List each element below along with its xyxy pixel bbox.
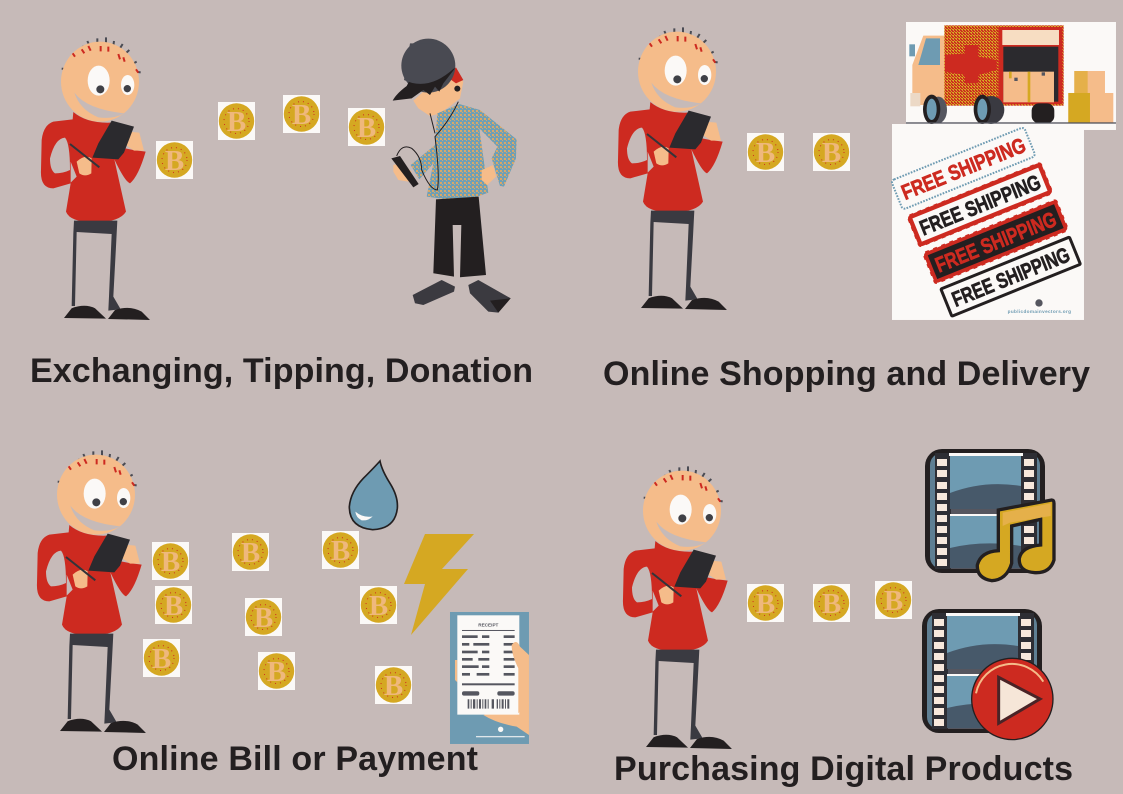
coin 1: B bbox=[165, 145, 184, 177]
coin 4 bbox=[232, 533, 269, 571]
coin 4: B bbox=[357, 112, 376, 144]
figure: man with tablet bbox=[623, 466, 732, 749]
coin 1: B bbox=[756, 588, 775, 620]
coin 9 bbox=[375, 666, 412, 704]
coin 2: B bbox=[227, 106, 246, 138]
heading: Online Bill or Payment bbox=[112, 740, 478, 778]
coin 4 bbox=[348, 108, 385, 146]
coin 3 bbox=[875, 581, 912, 619]
stamp: black border: FREE SHIPPING bbox=[948, 243, 1073, 312]
coin 2 bbox=[813, 584, 850, 622]
coin 1: B bbox=[756, 137, 775, 169]
coin 3 bbox=[143, 639, 180, 677]
panel: exchanging, tipping, donation bbox=[30, 37, 533, 390]
coin 5 bbox=[245, 598, 282, 636]
coin 9: B bbox=[384, 670, 403, 702]
figure: man with tablet bbox=[37, 450, 146, 733]
coin 7: B bbox=[331, 535, 350, 567]
coin 6: B bbox=[267, 656, 286, 688]
stamp: red border: FREE SHIPPING bbox=[916, 170, 1044, 240]
coin 2 bbox=[813, 133, 850, 171]
coin 3 bbox=[283, 95, 320, 133]
image: receipt in hand: RECEIPT bbox=[478, 623, 499, 628]
stamp: black filled: FREE SHIPPING bbox=[932, 207, 1060, 277]
coin 1 bbox=[152, 542, 189, 580]
coin 6 bbox=[258, 652, 295, 690]
coin 3: B bbox=[884, 585, 903, 617]
figure: man with tablet bbox=[618, 27, 727, 310]
coin 2: B bbox=[822, 137, 841, 169]
icon: film with play button bbox=[922, 609, 1053, 740]
icon: lightning bolt bbox=[404, 534, 474, 635]
heading: Online Shopping and Delivery bbox=[603, 355, 1090, 393]
coin 2: B bbox=[822, 588, 841, 620]
coin 2 bbox=[218, 102, 255, 140]
panel: online shopping and delivery bbox=[603, 22, 1116, 393]
image: receipt in hand bbox=[450, 612, 529, 744]
coin 2: B bbox=[164, 590, 183, 622]
image: delivery truck bbox=[906, 22, 1116, 130]
heading: Purchasing Digital Products bbox=[614, 750, 1073, 788]
coin 2 bbox=[155, 586, 192, 624]
icon: water drop bbox=[349, 461, 397, 530]
coin 3: B bbox=[152, 643, 171, 675]
coin 3: B bbox=[292, 99, 311, 131]
figure: boy with cap and phone bbox=[391, 39, 517, 313]
coin 1 bbox=[747, 584, 784, 622]
stamp: red border bbox=[908, 163, 1052, 246]
coin 8 bbox=[360, 586, 397, 624]
coin 4: B bbox=[241, 537, 260, 569]
coin 8: B bbox=[369, 590, 388, 622]
coin 1 bbox=[156, 141, 193, 179]
stamp: dotted outline: FREE SHIPPING bbox=[898, 133, 1029, 205]
panel: purchasing digital products bbox=[614, 449, 1073, 788]
coin 7 bbox=[322, 531, 359, 569]
stamp: black filled bbox=[924, 200, 1068, 283]
stamp: black border bbox=[941, 237, 1080, 316]
coin 1: B bbox=[161, 546, 180, 578]
coin 1 bbox=[747, 133, 784, 171]
icon: film with music note bbox=[925, 449, 1054, 581]
heading: Exchanging, Tipping, Donation bbox=[30, 352, 533, 390]
coin 5: B bbox=[254, 602, 273, 634]
image: free shipping stamps bbox=[891, 124, 1084, 320]
panel: online bill or payment bbox=[37, 450, 529, 778]
figure: man with tablet bbox=[41, 37, 150, 320]
image: free shipping stamps: publicdomainvectors.org bbox=[1008, 309, 1071, 314]
